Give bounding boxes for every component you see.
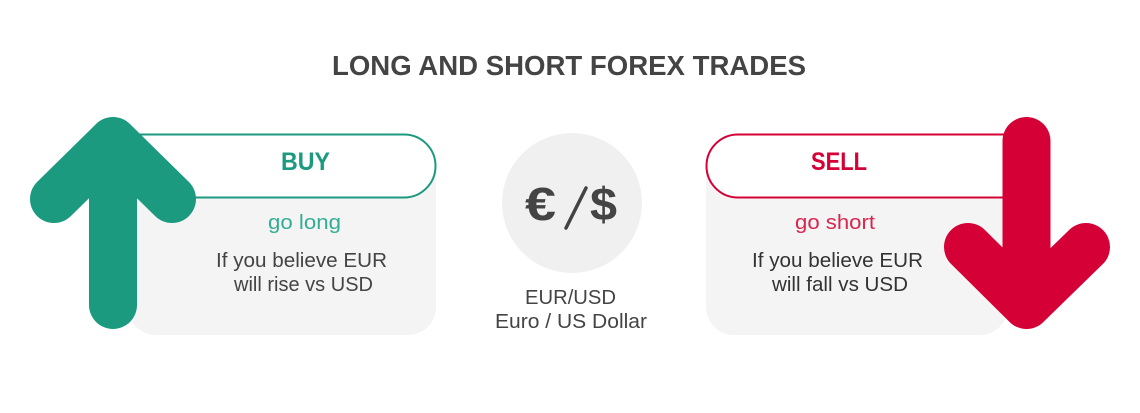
icon: dollar sign: $ <box>590 178 617 230</box>
sell pill <box>706 134 1042 198</box>
title: LONG AND SHORT FOREX TRADES <box>332 50 806 81</box>
currency pair label: Euro / US Dollar <box>495 311 647 333</box>
buy pill <box>100 134 436 198</box>
currency circle <box>502 133 642 273</box>
icon: up arrow <box>54 141 172 305</box>
sell description: will fall vs USD <box>771 274 908 296</box>
buy heading: BUY <box>281 148 330 176</box>
panel: buy <box>54 134 436 335</box>
sell description: If you believe EUR <box>752 250 923 272</box>
sell subheading: go short <box>795 212 875 234</box>
icon: slash <box>566 188 586 228</box>
currency pair label: EUR/USD <box>525 287 616 309</box>
buy card background <box>128 166 436 335</box>
panel: sell <box>706 134 1086 335</box>
panel: currency pair <box>495 133 647 333</box>
buy description: will rise vs USD <box>233 274 373 296</box>
sell card background <box>706 166 1008 335</box>
icon: euro sign: € <box>525 178 556 230</box>
buy subheading: go long <box>268 212 341 234</box>
sell heading: SELL <box>811 148 867 176</box>
buy description: If you believe EUR <box>216 250 387 272</box>
icon: down arrow <box>968 141 1086 305</box>
